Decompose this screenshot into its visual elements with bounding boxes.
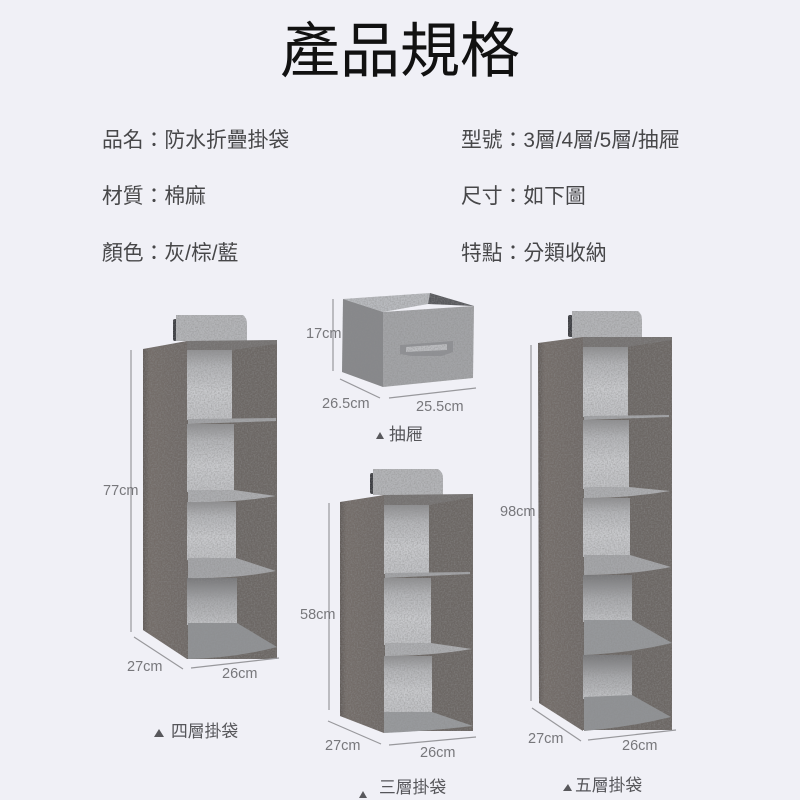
spec: model: 型號：3層/4層/5層/抽屜 xyxy=(461,129,679,152)
four-tier: height label: 77cm xyxy=(103,483,138,499)
drawer: height label: 17cm xyxy=(306,326,341,342)
drawer: dimension lines xyxy=(333,299,476,398)
drawer: side face xyxy=(342,299,383,387)
spec: product name: 品名：防水折疊掛袋 xyxy=(102,129,289,152)
five-tier hanging organizer xyxy=(538,311,672,731)
spec list xyxy=(102,129,679,265)
five-tier: hanger handle xyxy=(568,311,642,338)
four-tier: caption: 四層掛袋 xyxy=(171,722,238,741)
five-tier: caption: 五層掛袋 xyxy=(575,776,642,795)
four-tier hanging organizer xyxy=(143,315,277,659)
drawer: front face xyxy=(383,306,474,387)
four-tier: dimension lines xyxy=(131,350,279,669)
three-tier: caption: 三層掛袋 xyxy=(379,778,446,797)
drawer: inner walls xyxy=(343,293,474,312)
spec: feature: 特點：分類收納 xyxy=(461,242,607,265)
four-tier: shelf body xyxy=(143,340,277,659)
four-tier: depth label: 27cm xyxy=(127,659,162,675)
drawer: depth label: 26.5cm xyxy=(322,396,370,412)
drawer: caption: 抽屜 xyxy=(389,425,423,444)
three-tier: height label: 58cm xyxy=(300,607,335,623)
drawer: pull handle xyxy=(400,341,453,356)
spec: size: 尺寸：如下圖 xyxy=(461,185,586,208)
three-tier: width label: 26cm xyxy=(420,745,455,761)
five-tier: shelf body xyxy=(538,337,672,731)
drawer: width label: 25.5cm xyxy=(416,399,464,415)
drawer box xyxy=(342,293,474,387)
five-tier: depth label: 27cm xyxy=(528,731,563,747)
four-tier: hanger handle xyxy=(173,315,247,341)
four-tier: width label: 26cm xyxy=(222,666,257,682)
five-tier: height label: 98cm xyxy=(500,504,535,520)
three-tier: hanger handle xyxy=(370,469,443,495)
three-tier hanging organizer xyxy=(340,469,473,733)
five-tier: dimension lines xyxy=(531,345,676,741)
three-tier: shelf body xyxy=(340,494,473,733)
spec: material: 材質：棉麻 xyxy=(102,185,206,208)
three-tier: dimension lines xyxy=(328,503,476,745)
title: 產品規格 xyxy=(280,18,520,85)
three-tier: depth label: 27cm xyxy=(325,738,360,754)
five-tier: width label: 26cm xyxy=(622,738,657,754)
spec: colour: 顏色：灰/棕/藍 xyxy=(102,242,238,265)
